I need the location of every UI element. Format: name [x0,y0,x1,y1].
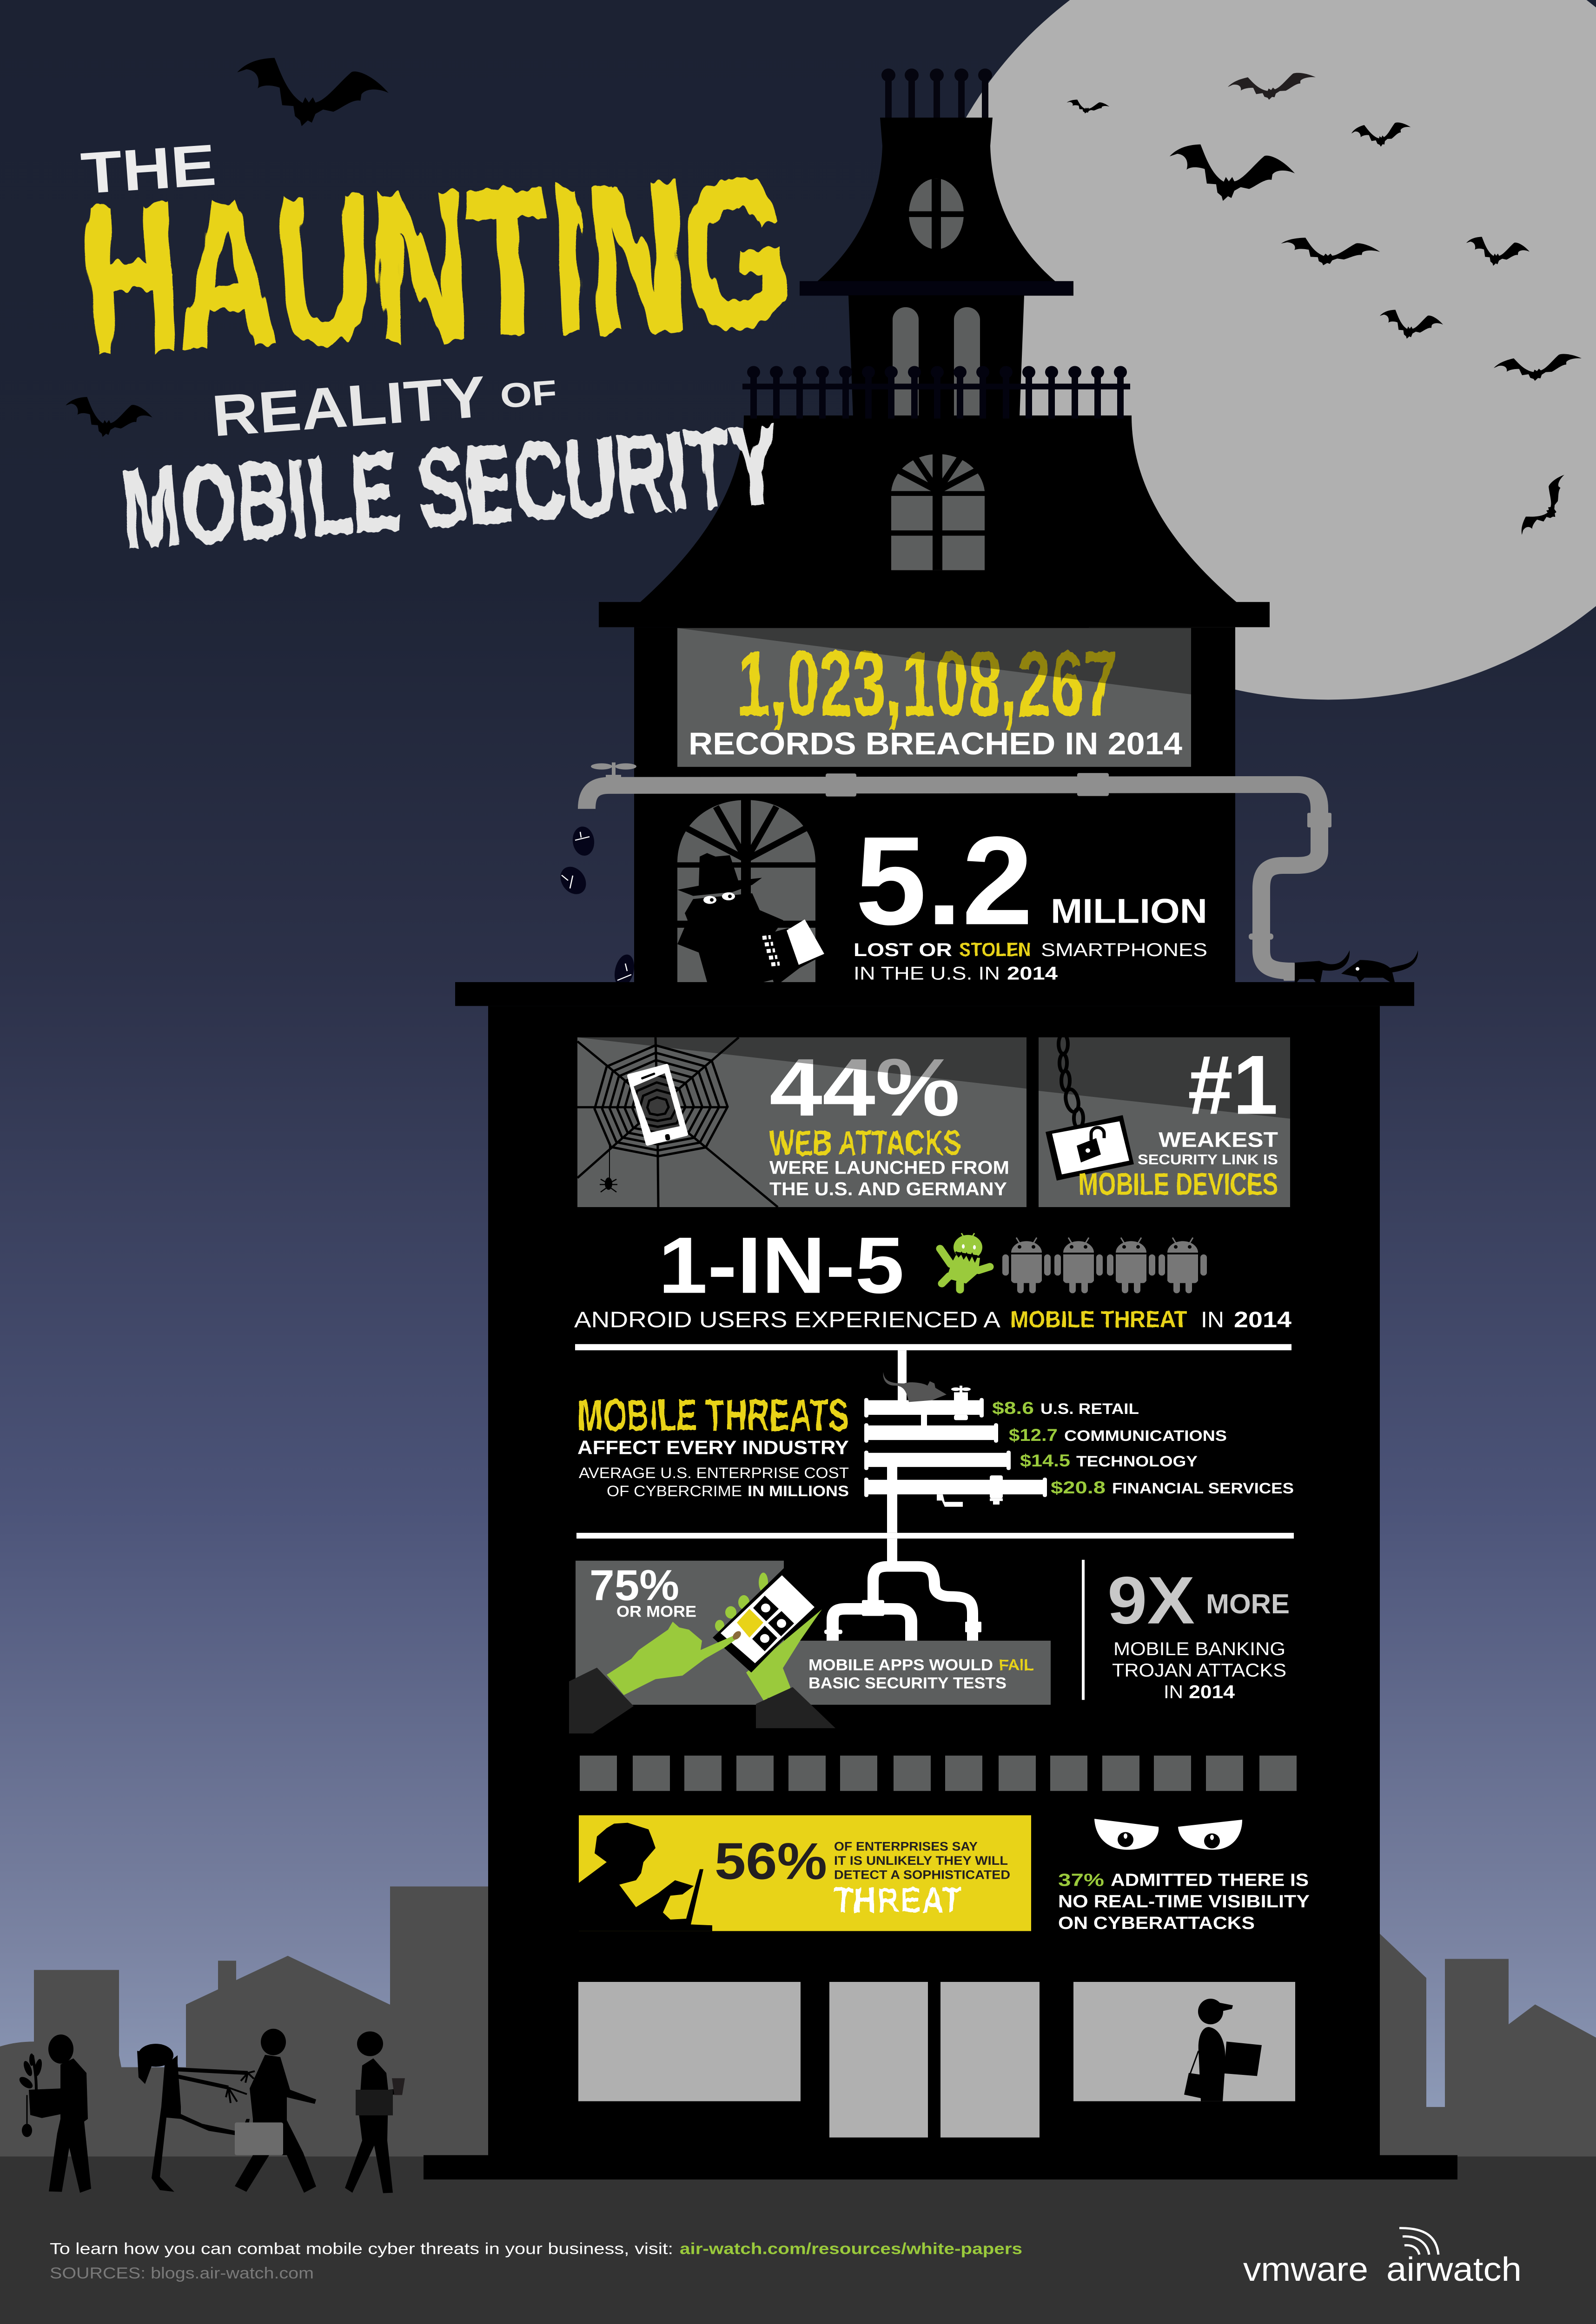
footer text: air-watch.com/resources/white-papers [680,2240,1022,2258]
value labels: $8.6 [992,1399,1034,1418]
stat: 5.2 million: LOST OR [854,939,952,960]
bat left of title [66,397,152,437]
stat: 9x more trojan attacks: 2014 [1189,1681,1235,1702]
icon: delivery person in window [1184,1999,1262,2101]
logos: airwatch [1386,2251,1522,2288]
storefront windows [578,1982,1295,2138]
dark diagonal shade [577,1037,1026,1089]
title: OF [499,373,558,416]
logos [1243,2228,1522,2288]
threat word: THREAT [834,1881,961,1920]
mobile threats heading [577,1390,849,1500]
weakest link text: MOBILE DEVICES [1079,1167,1278,1202]
fan window on roof [891,450,985,570]
divider rule top [575,1344,1291,1350]
stat: 1 in 5 android users [574,1221,1291,1332]
stat: 5.2 million: 2014 [1007,963,1058,984]
breach count: 1,023,108,267 [737,632,1117,735]
stat: 5.2 million: STOLEN [959,939,1031,961]
panel: web attacks [577,1037,1026,1207]
bats over the moon [1067,64,1584,544]
web attacks text [769,1124,1009,1199]
android caption [574,1306,1291,1332]
stat: 5.2 million: SMARTPHONES [1041,939,1207,960]
records label: RECORDS BREACHED IN 2014 [689,726,1182,761]
stat: 5.2 million: IN THE U.S. IN [854,963,1000,984]
mobile threats heading: OF CYBERCRIME [607,1483,742,1500]
falling computer mice [555,825,637,989]
main roof eave [599,602,1270,627]
person with office box [17,2034,91,2193]
icon: four grey androids [1002,1238,1207,1293]
enterprise text: IT IS UNLIKELY THEY WILL [834,1854,1008,1868]
stat: 37 percent [1058,1870,1310,1933]
mobile threats heading: IN MILLIONS [748,1483,849,1500]
title: THE [79,132,218,206]
value labels: $20.8 [1051,1479,1106,1498]
pipe: communications [864,1423,998,1443]
android caption: ANDROID USERS EXPERIENCED A [574,1307,1001,1332]
android caption: MOBILE THREAT [1010,1306,1187,1332]
people walking past [17,2029,405,2193]
44 percent: 44% [769,1042,960,1133]
footer text [50,2240,1022,2282]
apps fail text [808,1656,1033,1692]
title [77,132,794,572]
bat top left [237,58,389,126]
stat: 1 in 5 android users: 1-IN-5 [658,1221,904,1310]
icon: airwatch signal arcs [1399,2228,1438,2255]
cupola eave [800,281,1073,296]
enterprise text: DETECT A SOPHISTICATED [834,1868,1010,1882]
water pipe across tower [587,762,1331,981]
icon: chain [1059,1034,1083,1128]
stat: 9x more trojan attacks: TROJAN ATTACKS [1112,1660,1286,1681]
tower body [848,295,1024,418]
panel: mobile apps fail: OR MORE [616,1603,696,1620]
stat: 37 percent: NO REAL-TIME VISIBILITY [1058,1892,1310,1911]
icon: green zombie android [940,1233,990,1290]
roof ledge [455,982,1414,1006]
icon: person at laptop silhouette [579,1823,712,1931]
title: MOBILE SECURITY [117,403,782,572]
stat: 37 percent: 37% [1058,1870,1104,1890]
dark diagonal shade [1039,1037,1290,1119]
apps fail text: FAIL [999,1656,1033,1674]
mobile threats heading: AVERAGE U.S. ENTERPRISE COST [579,1465,849,1482]
weakest link text [1079,1128,1278,1202]
main roof [638,416,1238,604]
panel: mobile apps fail [569,1561,1051,1734]
value labels: $12.7 [1009,1426,1058,1445]
mobile threats heading: MOBILE THREATS [577,1390,849,1440]
icon: rats on the ledge [1295,951,1418,982]
stat: 5.2 million: MILLION [1051,892,1207,931]
chart: cybercrime pipes [577,1350,1294,1563]
value labels: $14.5 [1020,1452,1070,1471]
row of small windows [580,1756,1297,1791]
android caption: 2014 [1234,1307,1291,1332]
stat: 5.2 million [854,810,1207,984]
building body [488,1006,1380,2156]
pipe: retail [864,1386,984,1420]
web attacks text: THE U.S. AND GERMANY [769,1178,1007,1199]
enterprise text: OF ENTERPRISES SAY [834,1839,978,1853]
icon: spy silhouette [677,853,824,982]
logos: vmware [1243,2251,1368,2288]
round window [909,178,964,250]
footer text: SOURCES: blogs.air-watch.com [50,2265,314,2282]
dark diagonal shade [677,628,1191,694]
icon: glaring eyes [1094,1819,1242,1850]
icon: tap handle [591,763,636,770]
icon: zombie hands with tablet [569,1568,835,1734]
title: HAUNTING [77,136,794,396]
woman with bag and coffee [345,2031,405,2193]
web attacks text: WEB ATTACKS [769,1124,961,1162]
skyline silhouette left [0,1887,489,2159]
stat: 9x more trojan attacks [1082,1560,1290,1702]
weakest link text: SECURITY LINK IS [1138,1151,1278,1168]
number one: #1 [1188,1038,1278,1132]
stat: 9x more trojan attacks: MOBILE BANKING [1113,1638,1285,1659]
balcony railing [742,366,1130,419]
value labels: TECHNOLOGY [1076,1453,1198,1470]
value labels: FINANCIAL SERVICES [1112,1480,1294,1497]
android caption: IN [1201,1307,1224,1332]
spider web [577,1037,778,1207]
icon: smartphone caught in web [625,1066,694,1144]
stat: 37 percent: ON CYBERATTACKS [1058,1914,1255,1933]
enterprise text [834,1839,1010,1882]
56 percent: 56% [715,1833,827,1890]
twin arched windows [893,307,980,416]
value labels: COMMUNICATIONS [1064,1428,1227,1445]
icon: spider [600,1145,617,1192]
icon: tablet with open padlock [1046,1115,1134,1181]
panel: spy window [677,796,824,986]
haunted house tower [599,68,1270,985]
stat: 9x more trojan attacks: MORE [1206,1588,1290,1619]
icon: grey rat on pipe [883,1372,947,1402]
pipe: financial services [864,1475,1047,1507]
pipe: technology [864,1451,1011,1470]
value labels [992,1399,1294,1498]
panel: weakest link [1039,1034,1290,1207]
stat: 9x more trojan attacks: IN [1164,1681,1183,1702]
lower pipes [824,1566,981,1641]
skyline silhouette right [1380,1934,1596,2159]
web attacks text: WERE LAUNCHED FROM [769,1157,1009,1178]
zombie [137,2044,255,2192]
apps fail text: MOBILE APPS WOULD [808,1656,993,1674]
panel: 56 percent of enterprises [579,1815,1031,1931]
finials [881,68,992,119]
divider rule middle [576,1533,1294,1538]
value labels: U.S. RETAIL [1040,1401,1139,1418]
weakest link text: WEAKEST [1159,1128,1278,1151]
stat: 9x more trojan attacks: 9X [1107,1563,1195,1638]
footer text: To learn how you can combat mobile cyber threats in your business, visit: [50,2240,673,2258]
ground [0,2157,1596,2324]
panel: records breached [677,628,1191,767]
mobile threats heading: AFFECT EVERY INDUSTRY [577,1437,849,1459]
man with briefcase [235,2029,316,2193]
plinth [424,2155,1457,2179]
main building [424,982,1457,2179]
upper storey [634,627,1235,985]
75 percent: 75% [589,1561,679,1610]
cupola [815,118,1057,283]
title: REALITY [210,364,488,449]
apps fail text: BASIC SECURITY TESTS [808,1674,1007,1692]
stat: 37 percent: ADMITTED THERE IS [1111,1870,1309,1890]
moon [915,0,1596,700]
stat: 5.2 million: 5.2 [855,810,1033,951]
